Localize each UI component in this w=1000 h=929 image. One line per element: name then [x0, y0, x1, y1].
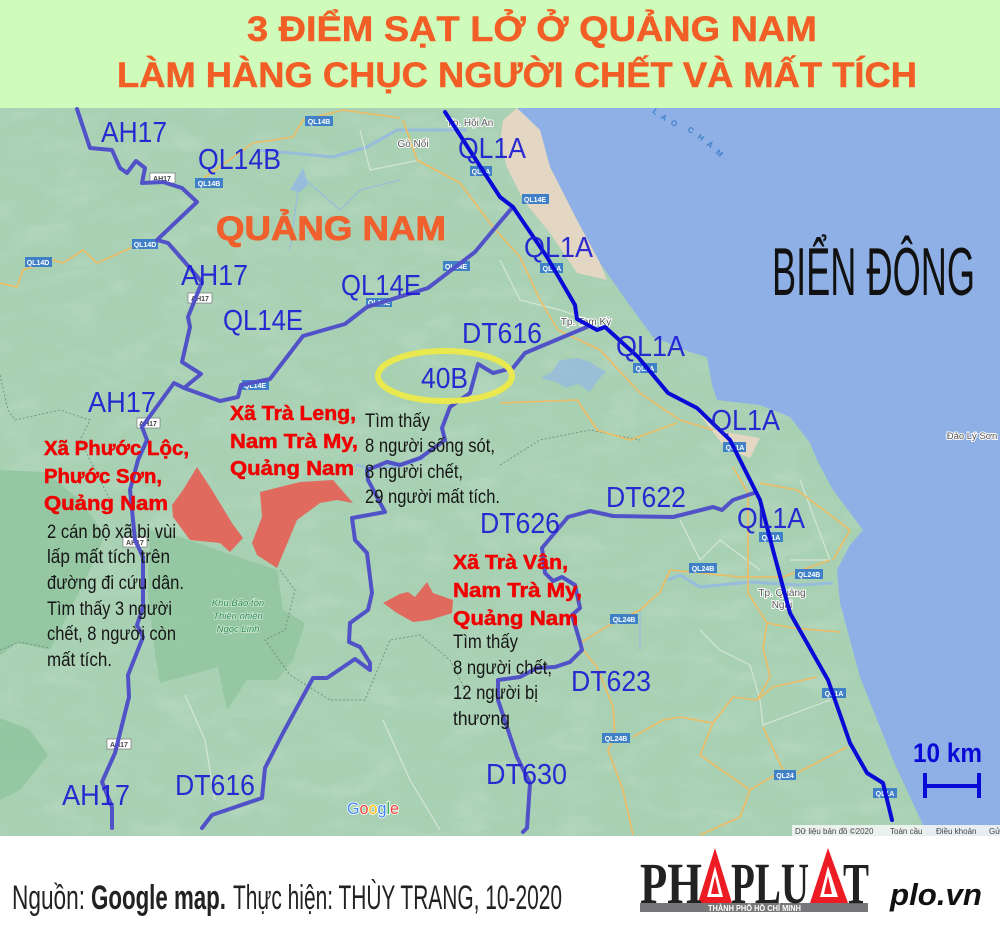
route labels: QL14B: [198, 144, 281, 176]
map land base: [0, 108, 1000, 836]
shield labels: national roads: QL14E: [368, 300, 390, 307]
logo: Pháp Luật: PH: [640, 851, 702, 916]
shield labels: national roads: QL24: [776, 773, 794, 780]
route labels: AH17: [62, 780, 130, 812]
callout: Phước Lộc: 2 cán bộ xã bị vùi: [47, 522, 176, 543]
callout: Trà Vân: Xã Trà Vân,: [453, 551, 568, 574]
landslide area: Trà Vân: [383, 582, 453, 622]
place names: H: [696, 132, 706, 143]
callout: Phước Lộc: [44, 437, 189, 671]
route labels: DT630: [486, 759, 567, 791]
callout: Phước Lộc: Quảng Nam: [44, 492, 168, 515]
place names: O: [669, 118, 679, 129]
callout: Trà Vân: [453, 551, 582, 730]
scale bar: 10 km: 10 km: [913, 738, 982, 768]
callout: Phước Lộc: Xã Phước Lộc,: [44, 437, 189, 460]
route labels: DT616: [175, 770, 255, 802]
route AH17: [77, 109, 202, 828]
footer: source credit: Thực hiện: THÙY TRANG, 10-2020: [233, 879, 562, 917]
shield labels: national roads: QL24B: [613, 617, 635, 624]
route DT622, DT626, DT623, DT630: [498, 493, 754, 832]
route labels: QL1A: [616, 331, 686, 363]
callout: Phước Lộc: Phước Sơn,: [44, 465, 162, 488]
callout: Phước Lộc: đường đi cứu dân.: [47, 573, 184, 594]
shield labels: national roads: QL1A: [825, 691, 843, 698]
shield labels: national roads: QL24B: [692, 566, 714, 573]
logo bar: [640, 903, 868, 912]
logo: Pháp Luật: [640, 848, 869, 916]
shield labels: national roads: QL14B: [308, 119, 330, 126]
route labels: [62, 117, 806, 812]
callout: Trà Leng: Xã Trà Leng,: [230, 402, 356, 425]
shield labels: national roads: QL1A: [876, 791, 894, 798]
place names: Thiên nhiên: [213, 611, 263, 622]
website label: plo.vn: [889, 877, 982, 912]
sea: [517, 108, 1000, 836]
shield labels: AH17: AH17: [191, 296, 209, 303]
shield labels: national roads: QL14E: [524, 197, 546, 204]
callout: Trà Leng: 8 người chết,: [365, 462, 463, 483]
logo red letter A second: [810, 848, 848, 903]
callout: Trà Leng: [230, 402, 500, 508]
route labels: DT622: [606, 482, 686, 514]
callout: Trà Vân: 8 người chết,: [453, 658, 552, 679]
shield labels: national roads: QL1A: [543, 266, 561, 273]
route labels: AH17: [88, 387, 156, 419]
place names: Ngọc Linh: [217, 624, 259, 635]
scale bar: 10 km: [913, 738, 982, 798]
callout: Trà Vân: thương: [453, 709, 510, 730]
callout: Trà Leng: Quảng Nam: [230, 457, 354, 480]
route QL1A: [445, 112, 892, 820]
route labels: DT616: [462, 318, 542, 350]
place names: Gò Nổi: [397, 138, 429, 150]
callout: Phước Lộc: lấp mất tích trên: [47, 547, 170, 568]
forest areas: [0, 470, 305, 800]
route labels: 40B: [421, 363, 468, 395]
place names: A: [659, 112, 669, 123]
map attribution: Dữ liệu bản đồ ©2020: [795, 827, 874, 836]
shield labels: national roads: QL1A: [472, 169, 490, 176]
shield labels: national roads: QL24B: [605, 736, 627, 743]
shield labels: AH17: AH17: [139, 421, 157, 428]
place names: Khu Bảo tồn: [212, 598, 264, 609]
title banner: LÀM HÀNG CHỤC NGƯỜI CHẾT VÀ MẤT TÍCH: [117, 55, 917, 95]
minor roads: [185, 130, 830, 830]
main roads: [0, 110, 850, 835]
logo: Pháp Luật: THÀNH PHỐ HỒ CHÍ MINH: [708, 903, 801, 913]
title banner: 3 ĐIỂM SẠT LỞ Ở QUẢNG NAM: [247, 9, 817, 49]
place names: Tp. Quảng: [758, 588, 806, 599]
terrain texture: [0, 108, 1000, 836]
route labels: DT626: [480, 508, 560, 540]
shield labels: AH17: AH17: [110, 742, 128, 749]
route labels: AH17: [101, 117, 167, 149]
place names: M: [714, 148, 725, 159]
route labels: QL14E: [341, 270, 421, 302]
route labels: AH17: [181, 260, 248, 292]
footer: source credit: Nguồn:: [12, 879, 85, 917]
callout: Trà Vân: Quảng Nam: [453, 607, 578, 630]
logo red letter A first: [698, 848, 732, 903]
shield labels: national roads: QL14E: [244, 383, 266, 390]
shield labels: national roads: QL14B: [198, 181, 220, 188]
place names: [212, 106, 997, 635]
place names: Tp. Tam Kỳ: [561, 317, 611, 328]
logo: Pháp Luật: T: [843, 851, 869, 916]
route DT616: [202, 327, 587, 828]
callout: Phước Lộc: Tìm thấy 3 người: [47, 599, 172, 620]
callout: Trà Leng: 29 người mất tích.: [365, 487, 500, 508]
route labels: DT623: [571, 666, 651, 698]
coastal sand: [500, 108, 607, 280]
shield labels: national roads: QL14E: [445, 264, 467, 271]
route labels: QL1A: [711, 405, 781, 437]
province label: Quảng Nam: QUẢNG NAM: [216, 210, 446, 248]
map attribution: Toàn cầu: [890, 827, 922, 836]
place names: C: [686, 125, 696, 136]
callout: Trà Leng: Nam Trà My,: [230, 430, 358, 453]
place names: L: [651, 106, 660, 117]
place names: Tp. Hội An: [447, 118, 493, 129]
route labels: QL14E: [223, 305, 303, 337]
shield labels: national roads: QL14D: [134, 242, 156, 249]
callout: Trà Leng: Tìm thấy: [365, 411, 430, 432]
shield labels: national roads: QL24B: [798, 572, 820, 579]
callout: Phước Lộc: mất tích.: [47, 650, 112, 671]
shield labels: national roads: [25, 116, 897, 798]
rivers and lakes: [260, 130, 833, 650]
protected border lines: [0, 375, 640, 700]
shield labels: AH17: AH17: [126, 540, 144, 547]
callout: Trà Vân: Tìm thấy: [453, 632, 518, 653]
map attribution: [792, 825, 1000, 836]
shield labels: national roads: QL14D: [27, 260, 49, 267]
place names: Đảo Lý Sơn: [947, 431, 997, 442]
footer: source credit: [0, 836, 1000, 929]
panel: map: [0, 106, 1000, 836]
Google logo: Google: [347, 799, 399, 818]
shield labels: national roads: QL1A: [636, 366, 654, 373]
shield labels: AH17: [107, 173, 212, 749]
title banner: [0, 0, 1000, 108]
landslide area: Phước Lộc: [172, 467, 243, 552]
route labels: QL1A: [524, 232, 594, 264]
highlight ellipse: road 40B: [378, 351, 512, 401]
footer: source credit: Google map.: [91, 879, 226, 917]
map attribution: Điều khoản: [936, 827, 976, 836]
place names: À: [705, 139, 715, 150]
shield labels: national roads: QL1A: [762, 535, 780, 542]
logo: Pháp Luật: PLU: [731, 851, 809, 916]
route QL14E: [184, 208, 512, 401]
landslide area: Trà Leng: [252, 480, 353, 568]
place names: Ngãi: [772, 600, 792, 611]
route labels: QL1A: [737, 503, 806, 535]
callout: Trà Vân: Nam Trà My,: [453, 579, 582, 602]
shield labels: national roads: QL1A: [726, 445, 744, 452]
callout: Phước Lộc: chết, 8 người còn: [47, 624, 176, 645]
route labels: QL1A: [458, 133, 527, 165]
callout: Trà Leng: 8 người sống sót,: [365, 436, 495, 457]
shield labels: AH17: AH17: [153, 176, 171, 183]
callout: Trà Vân: 12 người bị: [453, 683, 538, 704]
